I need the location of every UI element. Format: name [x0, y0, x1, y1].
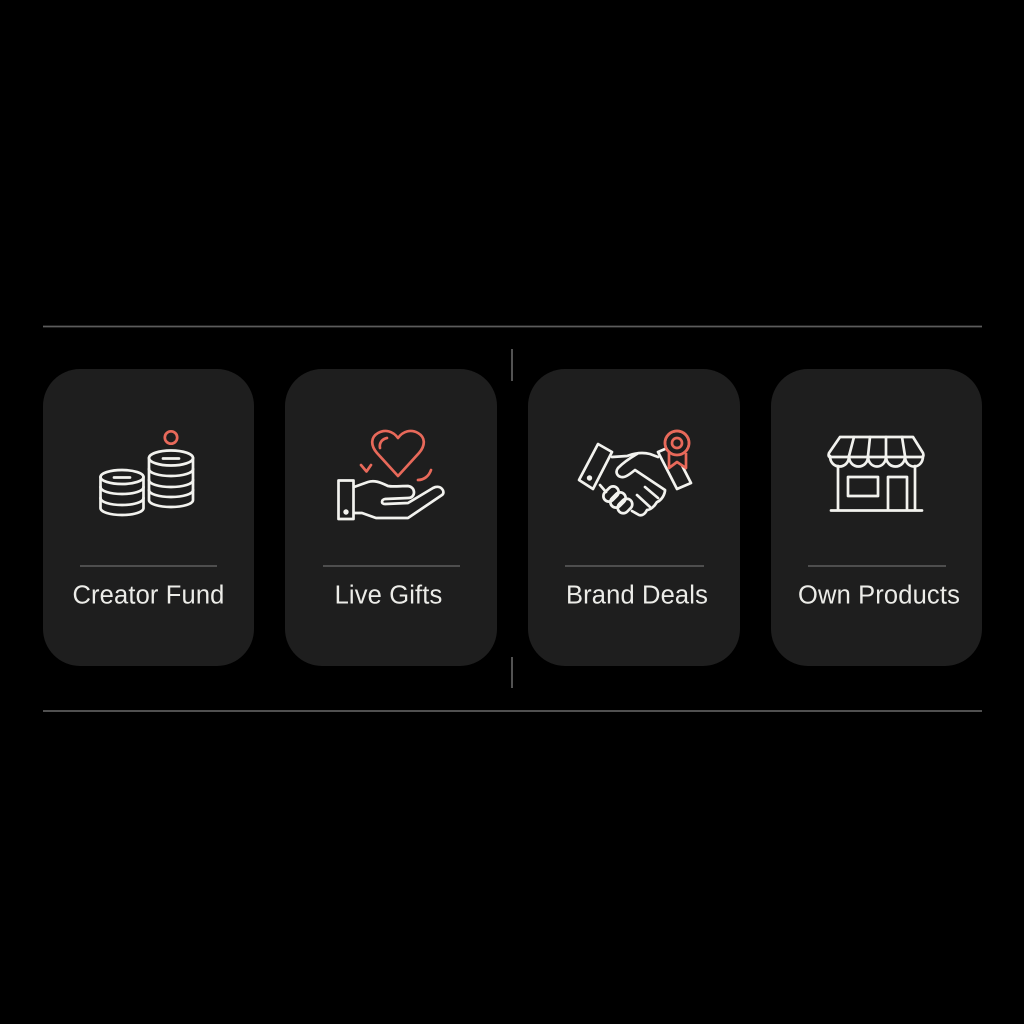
icon: handshake with ribbon	[579, 431, 691, 516]
icon: hand holding heart	[338, 431, 443, 519]
panel: Brand Deals	[528, 369, 740, 666]
panel: Own Products	[771, 369, 982, 666]
panel: Creator Fund	[43, 369, 254, 666]
panel: Live Gifts	[285, 369, 497, 666]
label: Creator Fund: Creator Fund	[72, 581, 225, 609]
label: Own Products: Own Products	[798, 581, 960, 609]
label: Brand Deals: Brand Deals	[566, 581, 708, 609]
label: Live Gifts: Live Gifts	[335, 581, 442, 609]
icon: coin stacks	[100, 431, 193, 515]
icon: storefront	[829, 437, 923, 510]
